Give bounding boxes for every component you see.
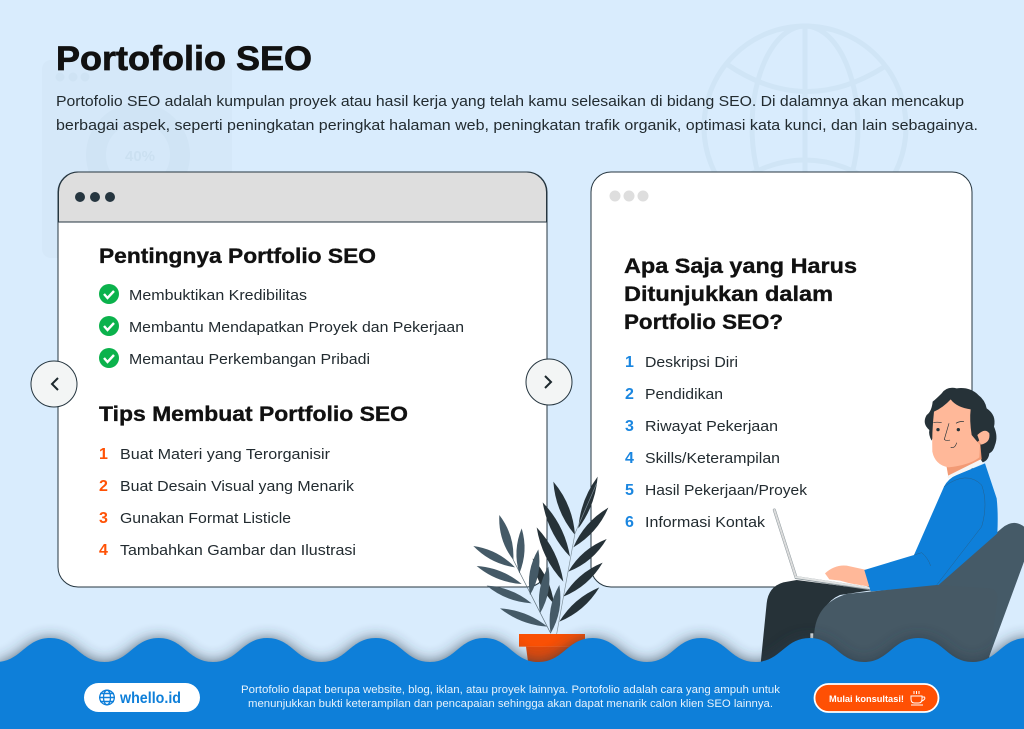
footer text: Portofolio dapat berupa website, blog, iklan, atau proyek lainnya. Portofolio adalah cara yang ampuh untuk <box>241 684 781 696</box>
portfolio contents list: 6 <box>625 514 634 531</box>
portfolio contents list: 3 <box>625 418 634 435</box>
heading: apa saja: Ditunjukkan dalam <box>624 283 833 306</box>
portfolio contents list: Informasi Kontak <box>645 514 766 531</box>
background watermark: globe <box>704 26 906 228</box>
portfolio contents list: 5 <box>625 482 634 499</box>
trousers <box>761 580 873 663</box>
button: mulai konsultasi: Mulai konsultasi! <box>829 694 904 705</box>
footer text: menunjukkan bukti keterampilan dan pencapaian sehingga akan dapat menarik calon klien SEO lainnya. <box>248 698 773 710</box>
heading: apa saja: Apa Saja yang Harus <box>624 255 857 278</box>
face details <box>933 422 964 448</box>
armchair seat <box>814 585 997 663</box>
face <box>932 399 980 467</box>
portfolio contents list: 2 <box>625 386 634 403</box>
tips list: Tambahkan Gambar dan Ilustrasi <box>120 542 356 559</box>
icon: globe <box>99 690 115 705</box>
arrow: previous <box>31 361 77 407</box>
heading: tips: Tips Membuat Portfolio SEO <box>99 403 408 426</box>
portfolio contents list: 4 <box>625 450 634 467</box>
heading: apa saja: Portfolio SEO? <box>624 311 783 334</box>
icon: coffee cup <box>911 691 925 705</box>
hand <box>825 565 869 587</box>
intro paragraph: Portofolio SEO adalah kumpulan proyek atau hasil kerja yang telah kamu selesaikan di bidang SEO. Di dalamnya akan mencakup <box>56 93 964 110</box>
logo pill: whello.id <box>84 683 200 712</box>
checklist: Membuktikan Kredibilitas <box>129 287 307 304</box>
window dots <box>610 190 648 202</box>
title: Portofolio SEO <box>56 40 312 78</box>
tips list: 1 <box>99 446 108 463</box>
heading: apa saja <box>624 255 857 334</box>
tips list: Gunakan Format Listicle <box>120 510 291 527</box>
illustration: man with laptop in armchair <box>761 388 1024 663</box>
portfolio contents list: 1 <box>625 354 634 371</box>
checklist <box>99 284 464 368</box>
arrow: next <box>526 359 572 405</box>
logo pill: whello.id: whello.id <box>119 690 181 707</box>
jacket <box>864 463 998 591</box>
tips list: 2 <box>99 478 108 495</box>
panel: pentingnya and tips <box>58 172 547 587</box>
background watermark: dashboard window <box>42 60 232 258</box>
tips list: 4 <box>99 542 108 559</box>
armchair back <box>927 523 1024 663</box>
neck and head <box>925 388 996 479</box>
tips list: 3 <box>99 510 108 527</box>
checklist: Memantau Perkembangan Pribadi <box>129 351 370 368</box>
checklist: Membantu Mendapatkan Proyek dan Pekerjaan <box>129 319 464 336</box>
wave shadow <box>0 640 1024 729</box>
hair <box>925 388 996 463</box>
heading: pentingnya: Pentingnya Portfolio SEO <box>99 245 376 268</box>
button: mulai konsultasi <box>814 684 938 712</box>
intro paragraph: berbagai aspek, seperti peningkatan peringkat halaman web, peningkatan trafik organik, optimasi kata kunci, dan lain sebagainya. <box>56 117 978 134</box>
portfolio contents list: Skills/Keterampilan <box>645 450 780 467</box>
panel: apa saja yang harus ditunjukkan <box>591 172 972 587</box>
illustration: potted plant <box>473 477 608 667</box>
window title bar <box>58 172 546 222</box>
ear <box>977 431 989 445</box>
portfolio contents list: Hasil Pekerjaan/Proyek <box>645 482 808 499</box>
laptop <box>774 510 869 588</box>
footer text <box>241 684 781 710</box>
footer wave band <box>0 638 1024 729</box>
plant pot <box>519 634 585 667</box>
intro paragraph <box>56 93 978 134</box>
portfolio contents list: Pendidikan <box>645 386 723 403</box>
portfolio contents list: Deskripsi Diri <box>645 354 738 371</box>
tips list <box>99 446 356 559</box>
background watermark: dashboard window: 40% <box>125 148 155 165</box>
tips list: Buat Materi yang Terorganisir <box>120 446 330 463</box>
portfolio contents list <box>625 354 808 531</box>
tips list: Buat Desain Visual yang Menarik <box>120 478 355 495</box>
portfolio contents list: Riwayat Pekerjaan <box>645 418 778 435</box>
